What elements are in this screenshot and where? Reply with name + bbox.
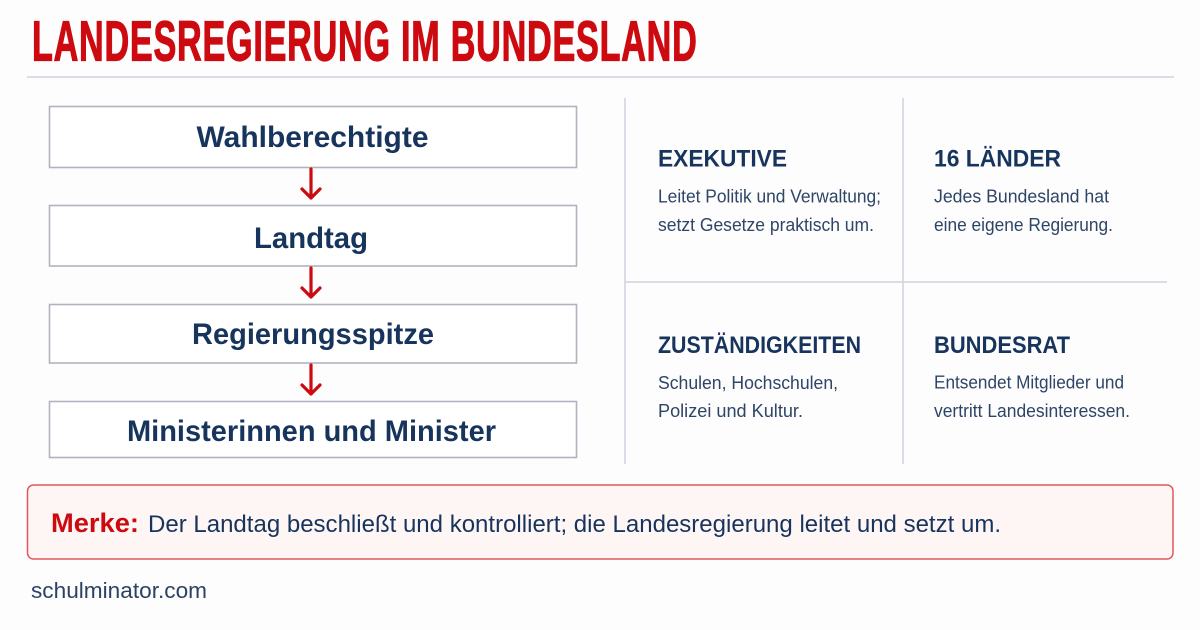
callout: Merke: [28, 485, 1173, 559]
panel: Zuständigkeiten: [658, 332, 861, 421]
footer: source: schulminator.com: [31, 578, 207, 603]
box: Regierungsspitze: Regierungsspitze: [192, 318, 434, 351]
panel: Bundesrat: BUNDESRAT: [934, 332, 1070, 359]
arrow: Regierungsspitze to Minister: [302, 365, 320, 394]
box: Wahlberechtigte: [50, 106, 576, 168]
arrow: Wahlberechtigte to Landtag: [302, 169, 320, 198]
panel: Bundesrat: [934, 332, 1130, 421]
panel: Exekutive: Leitet Politik und Verwaltung;: [658, 186, 881, 206]
panel: Zuständigkeiten: Schulen, Hochschulen,: [658, 373, 838, 393]
title: LANDESREGIERUNG IM BUNDESLAND: [32, 8, 697, 73]
box: Landtag: [50, 206, 576, 266]
panel: Exekutive: setzt Gesetze praktisch um.: [658, 215, 874, 235]
box: Ministerinnen und Minister: Ministerinnen und Minister: [127, 415, 496, 448]
panel: hierarchy flow: [50, 106, 576, 458]
callout: Merke: Der Landtag beschließt und kontrolliert; die Landesregierung leitet und setzt um.: [148, 511, 1001, 538]
box: Ministerinnen und Minister: [50, 402, 576, 458]
callout: Merke: Merke:: [51, 508, 139, 538]
panel: 16 Länder: eine eigene Regierung.: [934, 215, 1113, 235]
box: Wahlberechtigte: Wahlberechtigte: [196, 121, 428, 154]
panel: 16 Länder: [934, 146, 1113, 235]
panel: Exekutive: EXEKUTIVE: [658, 146, 787, 172]
panel: 16 Länder: 16 LÄNDER: [934, 146, 1061, 172]
panel: Zuständigkeiten: Polizei und Kultur.: [658, 401, 803, 421]
box: Regierungsspitze: [50, 304, 576, 363]
panel: Bundesrat: vertritt Landesinteressen.: [934, 401, 1130, 421]
panel: Bundesrat: Entsendet Mitglieder und: [934, 372, 1124, 392]
box: Landtag: Landtag: [254, 222, 368, 255]
panel: 16 Länder: Jedes Bundesland hat: [934, 186, 1109, 206]
panel: Zuständigkeiten: ZUSTÄNDIGKEITEN: [658, 332, 861, 359]
panel: Exekutive: [658, 146, 881, 235]
arrow: Landtag to Regierungsspitze: [302, 268, 320, 297]
